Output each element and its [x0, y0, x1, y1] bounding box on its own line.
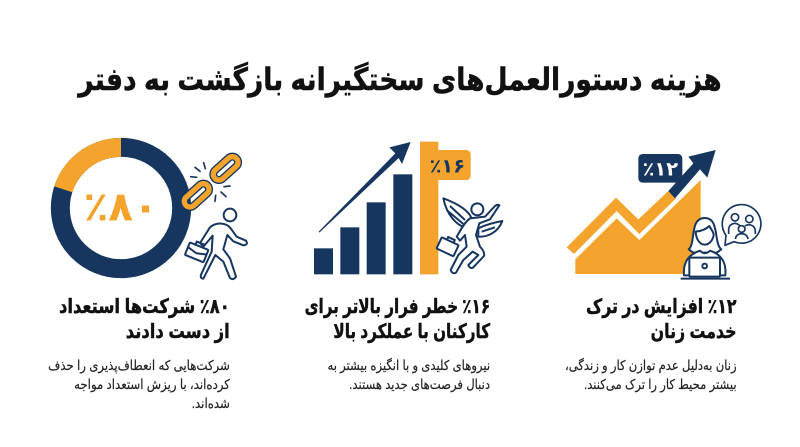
- illustration: bar chart with flag and winged man: [314, 142, 504, 274]
- badge 12 percent: [638, 154, 682, 183]
- illustration: rising area chart with woman at laptop: [566, 150, 762, 280]
- panel: women leaving: [565, 150, 762, 393]
- heading: از دست دادند: [126, 321, 230, 343]
- flag 16 percent: ٪۱۶: [430, 154, 465, 177]
- body text: [327, 358, 490, 392]
- bar chart: [314, 174, 412, 274]
- icon: broken chain: [182, 154, 240, 209]
- heading: ٪۱۶ خطر فرار بالاتر برای: [304, 296, 490, 318]
- heading: ٪۱۲ افزایش در ترک: [586, 296, 737, 318]
- illustration: donut with broken chain and walking man: [50, 138, 248, 280]
- panel: talent loss: [48, 138, 248, 411]
- body text: [565, 358, 737, 393]
- badge 12 percent: ٪۱۲: [643, 158, 678, 181]
- icon: speech bubble with people: [722, 205, 761, 245]
- heading: کارکنان با عملکرد بالا: [333, 321, 490, 343]
- body text: بیشتر محیط کار را ترک می‌کنند.: [584, 377, 737, 392]
- heading: [304, 296, 490, 344]
- body text: [48, 358, 230, 411]
- body text: شرکت‌هایی که انعطاف‌پذیری را حذف: [48, 358, 230, 373]
- arrow: [319, 142, 411, 233]
- arrow: [668, 150, 716, 198]
- icon: winged man with briefcase: [437, 198, 502, 273]
- heading: ٪۸۰ شرکت‌ها استعداد: [59, 296, 230, 318]
- donut chart 80 percent: [60, 147, 182, 269]
- heading: [586, 296, 737, 344]
- icon: woman with laptop: [681, 218, 730, 279]
- body text: نیروهای کلیدی و با انگیزه بیشتر به: [327, 358, 490, 373]
- icon: walking man with briefcase: [185, 209, 247, 279]
- flag 16 percent: [420, 142, 471, 274]
- panel: flight risk: [304, 142, 504, 392]
- area chart: [575, 180, 701, 274]
- body text: دنبال فرصت‌های جدید هستند.: [349, 377, 490, 392]
- heading: خدمت زنان: [651, 321, 737, 343]
- body text: کرده‌اند، با ریزش استعداد مواجه: [74, 377, 230, 392]
- body text: شده‌اند.: [192, 396, 230, 411]
- body text: زنان به‌دلیل عدم توازن کار و زندگی،: [565, 358, 737, 373]
- donut value: ٪۸۰: [83, 183, 158, 231]
- heading: [59, 296, 230, 344]
- title: هزینه دستورالعمل‌های سختگیرانه بازگشت به دفتر: [78, 62, 722, 97]
